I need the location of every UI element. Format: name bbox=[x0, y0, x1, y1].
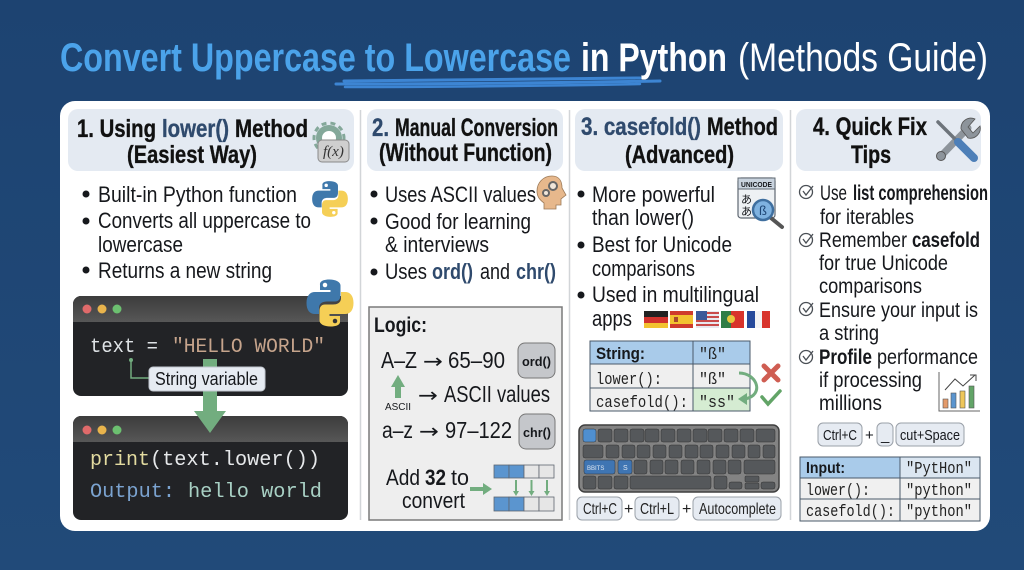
table: string comparison: "ß" bbox=[699, 346, 726, 365]
keyboard shortcut: ctrl+c ctrl+l autocomplete: Ctrl+C bbox=[583, 501, 617, 518]
table: input comparison: lower(): bbox=[806, 482, 870, 501]
heading: panel 4: 4. Quick Fix bbox=[813, 113, 927, 141]
button: chr() bbox=[519, 414, 555, 449]
icon: unicode magnifier: あ bbox=[741, 205, 752, 218]
tips checklist: Profile bbox=[819, 346, 872, 369]
tips checklist: for iterables bbox=[820, 206, 914, 229]
bullet list: panel 2: and bbox=[480, 259, 510, 284]
button: ord(): ord() bbox=[522, 354, 551, 369]
tips checklist: Ensure your input is bbox=[819, 299, 978, 322]
flag: germany bbox=[644, 311, 668, 328]
keyboard shortcut: ctrl+c cut+space bbox=[818, 423, 964, 446]
add 32 text: to bbox=[451, 465, 469, 490]
heading: panel 2: (Without Function) bbox=[379, 139, 552, 167]
bullet list: panel 3: comparisons bbox=[592, 256, 695, 281]
arrow: ascii up bbox=[385, 375, 411, 413]
bullet list: panel 1: Returns a new string bbox=[98, 258, 272, 283]
table: input comparison: casefold(): bbox=[806, 503, 895, 522]
bullet list: panel 2: Uses ASCII values bbox=[385, 182, 536, 207]
arrow: code to output bbox=[194, 359, 226, 433]
add 32 text: convert bbox=[402, 488, 465, 513]
title: Convert Uppercase to Lowercase bbox=[60, 36, 571, 80]
callout: string variable: String variable bbox=[155, 369, 258, 389]
bullet list: panel 2: & interviews bbox=[385, 232, 489, 257]
icon: bar chart growth bbox=[939, 372, 980, 411]
tips checklist: if processing bbox=[819, 369, 922, 392]
icon: unicode magnifier: ß bbox=[759, 203, 767, 218]
bullet list: panel 1: lowercase bbox=[98, 232, 183, 257]
code window: print output: print bbox=[90, 449, 150, 472]
icon: unicode magnifier: あ bbox=[741, 193, 752, 206]
keyboard: BBITS bbox=[587, 466, 604, 472]
code window: text variable: "HELLO WORLD" bbox=[172, 336, 325, 359]
logic box: ASCII values bbox=[444, 381, 550, 407]
flag: spain bbox=[670, 311, 693, 328]
keyboard shortcut: ctrl+c ctrl+l autocomplete: + bbox=[682, 501, 691, 518]
heading: panel 2 bbox=[367, 109, 563, 171]
tips checklist: Remember bbox=[819, 229, 907, 252]
logic box: 65–90 bbox=[448, 347, 505, 373]
bullet list: panel 3: Used in multilingual bbox=[592, 282, 759, 307]
code window: print output bbox=[73, 416, 348, 520]
arrow: curved lower to casefold bbox=[738, 373, 757, 405]
table: input comparison: "python" bbox=[906, 503, 972, 522]
code window: print output: Output: bbox=[90, 481, 175, 504]
button: chr(): chr() bbox=[523, 425, 551, 440]
keyboard shortcut: ctrl+c ctrl+l autocomplete bbox=[577, 497, 781, 520]
heading: panel 1: 1. Using bbox=[77, 115, 156, 143]
keyboard bbox=[579, 425, 779, 492]
heading: panel 4 bbox=[796, 109, 981, 171]
bullet list: panel 3: Best for Unicode bbox=[592, 232, 732, 257]
diagram: cell conversion bbox=[494, 465, 554, 511]
table: string comparison: "ss" bbox=[699, 394, 735, 413]
check icons bbox=[800, 186, 813, 364]
bullet list: panel 3: apps bbox=[592, 306, 632, 331]
tips checklist: Use bbox=[820, 182, 847, 205]
tips checklist: comparisons bbox=[819, 275, 922, 298]
icon: python logo small bbox=[312, 181, 348, 217]
keyboard shortcut: ctrl+c cut+space: + bbox=[865, 427, 874, 444]
title underline brush stroke bbox=[336, 78, 660, 87]
tips checklist bbox=[800, 182, 988, 415]
heading: panel 2: Manual Conversion bbox=[395, 114, 558, 142]
bullet list: panel 3 bbox=[578, 182, 759, 331]
bullet list: panel 3: More powerful bbox=[592, 182, 715, 207]
tips checklist: millions bbox=[819, 392, 882, 415]
bullet list: panel 2: Good for learning bbox=[385, 209, 531, 234]
bullet list: panel 1: Built-in Python function bbox=[98, 182, 297, 207]
heading: panel 3: 3. casefold() bbox=[581, 113, 701, 141]
main white card bbox=[60, 101, 990, 531]
bullet list: panel 2 bbox=[370, 182, 556, 284]
heading: panel 1: lower() bbox=[162, 115, 229, 143]
keyboard shortcut: ctrl+c cut+space: Ctrl+C bbox=[823, 427, 857, 444]
panel: 4 quick fix tips bbox=[796, 109, 988, 522]
logic box: a–z bbox=[382, 417, 413, 443]
icons: language flags bbox=[644, 311, 770, 328]
table: string comparison: lower(): bbox=[596, 371, 662, 390]
table: string comparison: String: bbox=[596, 344, 645, 363]
button: ord() bbox=[518, 343, 555, 378]
logic box: Logic: bbox=[374, 314, 427, 337]
heading: panel 3 bbox=[575, 109, 783, 171]
bullet list: panel 2: chr() bbox=[516, 259, 556, 284]
icon: python logo large bbox=[306, 280, 354, 326]
panel: 3 casefold bbox=[575, 109, 783, 520]
panel: 2 manual conversion bbox=[367, 109, 566, 520]
icon: red cross bbox=[764, 366, 778, 380]
logic box: → bbox=[423, 349, 443, 373]
code window: text variable bbox=[73, 296, 348, 396]
tips checklist: for true Unicode bbox=[819, 252, 948, 275]
bullet list: panel 1 bbox=[82, 182, 311, 283]
heading: panel 1: (Easiest Way) bbox=[127, 141, 257, 169]
keyboard shortcut: ctrl+c ctrl+l autocomplete: Ctrl+L bbox=[640, 501, 674, 518]
panel: 1 using lower() bbox=[68, 109, 354, 520]
keyboard: S bbox=[623, 465, 628, 472]
table: string comparison: casefold(): bbox=[596, 394, 688, 413]
add 32 text: 32 bbox=[425, 465, 446, 490]
keyboard shortcut: ctrl+c ctrl+l autocomplete: + bbox=[624, 501, 633, 518]
flag: france bbox=[747, 311, 770, 328]
table: string comparison bbox=[590, 341, 750, 413]
icon: unicode magnifier bbox=[738, 178, 782, 227]
logic box bbox=[369, 307, 562, 520]
arrow: add to convert bbox=[470, 483, 492, 495]
bullet list: panel 2: ord() bbox=[432, 259, 473, 284]
tips checklist: casefold bbox=[912, 229, 980, 252]
code window: print output: hello world bbox=[188, 481, 322, 504]
tips checklist: a string bbox=[819, 322, 879, 345]
heading: panel 4: Tips bbox=[851, 141, 891, 169]
flag: portugal bbox=[721, 311, 744, 328]
logic box: → bbox=[419, 419, 439, 443]
title bbox=[60, 36, 988, 80]
add 32 text bbox=[386, 465, 469, 513]
logic box: → bbox=[418, 383, 438, 407]
icon: unicode magnifier: UNICODE bbox=[741, 180, 772, 189]
table: string comparison: "ß" bbox=[699, 371, 726, 390]
icon: wrench and screwdriver bbox=[936, 118, 980, 160]
logic box: A–Z bbox=[381, 347, 417, 373]
heading: panel 1: Method bbox=[235, 115, 308, 143]
bullet list: panel 2: Uses bbox=[385, 259, 427, 284]
table: input comparison bbox=[800, 457, 980, 522]
add 32 text: Add bbox=[386, 465, 420, 490]
code window: print output: (text.lower()) bbox=[150, 449, 320, 472]
tips checklist: performance bbox=[877, 346, 978, 369]
table: input comparison: "PytHon" bbox=[906, 460, 972, 479]
logic box: 97–122 bbox=[445, 417, 512, 443]
title: in Python bbox=[581, 36, 727, 80]
arrow: ascii up: ASCII bbox=[385, 402, 411, 413]
heading: panel 1 bbox=[68, 109, 354, 171]
heading: panel 3: (Advanced) bbox=[625, 141, 734, 169]
heading: panel 2: 2. bbox=[372, 114, 389, 142]
icon: gear with f(x): f(x) bbox=[323, 144, 344, 160]
flag: usa bbox=[696, 311, 719, 328]
keyboard shortcut: ctrl+c cut+space: cut+Space bbox=[900, 427, 960, 444]
keyboard shortcut: ctrl+c cut+space: _ bbox=[880, 427, 890, 444]
icon: head with gears bbox=[537, 176, 566, 209]
keyboard shortcut: ctrl+c ctrl+l autocomplete: Autocomplete bbox=[699, 501, 776, 518]
bullet list: panel 1: Converts all uppercase to bbox=[98, 208, 311, 233]
bullet list: panel 3: than lower() bbox=[592, 205, 694, 230]
table: input comparison: "python" bbox=[906, 482, 972, 501]
icon: gear with f(x) bbox=[314, 123, 349, 162]
table: input comparison: Input: bbox=[806, 460, 845, 477]
code window: text variable: text = bbox=[90, 336, 158, 359]
icon: green check bbox=[762, 391, 780, 404]
heading: panel 3: Method bbox=[707, 113, 778, 141]
